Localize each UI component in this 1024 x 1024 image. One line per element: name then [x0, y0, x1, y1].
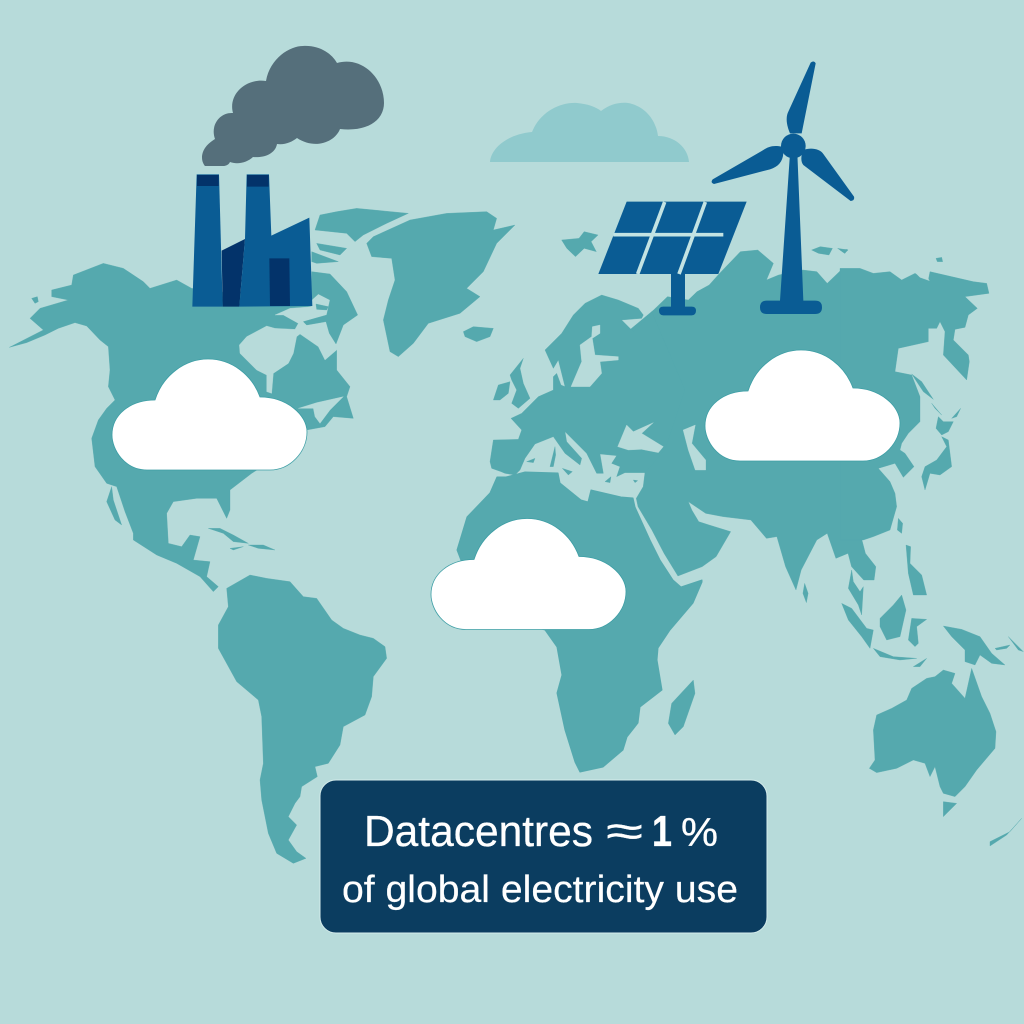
- Baltic Sea: [571, 325, 618, 387]
- turbine hub: [781, 134, 806, 158]
- icon: smoke cloud: [202, 46, 384, 166]
- map: Asia: [562, 232, 876, 603]
- world map: [9, 208, 1023, 863]
- icon: white cloud over Asia: [705, 350, 900, 461]
- Madagascar: [668, 680, 695, 735]
- Africa: [457, 472, 702, 772]
- Hudson Bay and Hudson Strait: [239, 294, 337, 393]
- solar panel post and foot: [659, 273, 696, 315]
- icon: white cloud over North America: [112, 359, 307, 470]
- callout headline: [364, 807, 718, 856]
- Baja California: [107, 487, 122, 525]
- solar panel grid lines: [613, 202, 723, 274]
- icon: factory: [192, 174, 312, 307]
- Hokkaido and Kuril islands: [932, 403, 961, 435]
- Baffin Island: [303, 272, 358, 344]
- callout background: [320, 780, 767, 933]
- Europe landmass: [490, 295, 685, 477]
- icon: solar panel: [598, 202, 747, 315]
- Arctic islands: [32, 208, 408, 303]
- map: East Asia: [840, 249, 989, 540]
- Sri Lanka: [803, 583, 808, 603]
- map: Southeast Asia and Oceania: [842, 545, 1023, 846]
- Greenland: [367, 212, 515, 357]
- Malay Peninsula: [848, 570, 863, 615]
- callout headline: %: [681, 811, 718, 855]
- callout headline: 1: [652, 807, 672, 856]
- Foxe Basin island: [316, 304, 328, 310]
- icon: wind turbine: [712, 61, 854, 314]
- northern islands: [840, 249, 943, 262]
- North America: [9, 263, 353, 592]
- factory dark roof section: [222, 239, 245, 307]
- solar panel surface: [598, 202, 747, 274]
- Mediterranean islands: [527, 447, 638, 483]
- Arctic bay: [915, 272, 929, 281]
- Philippines: [906, 545, 927, 595]
- Caspian Sea: [683, 425, 706, 470]
- chimney caps: [197, 175, 269, 187]
- Taiwan: [897, 518, 903, 533]
- Arctic islands of Eurasia: [562, 232, 848, 257]
- Sulawesi: [908, 618, 927, 647]
- Australia: [869, 668, 996, 797]
- turbine blades: [712, 61, 854, 201]
- Ireland: [493, 382, 510, 400]
- map: South America and Madagascar: [218, 575, 695, 863]
- New Guinea: [943, 626, 1005, 665]
- Caribbean islands: [208, 528, 275, 550]
- callout: datacentres statistic: [320, 780, 767, 933]
- South America: [218, 575, 387, 863]
- East Asia landmass: [840, 268, 989, 540]
- factory main building: [239, 174, 312, 307]
- icon: white cloud over Africa: [431, 518, 626, 630]
- Sakhalin: [912, 374, 933, 399]
- New Zealand: [990, 818, 1022, 846]
- map: Europe: [490, 295, 685, 483]
- factory door: [269, 258, 290, 306]
- Britain: [510, 358, 530, 408]
- callout subline: of global electricity use: [342, 869, 738, 911]
- Sumatra: [842, 603, 873, 648]
- turbine tower: [760, 153, 822, 314]
- Honshu: [922, 437, 952, 490]
- factory left chimney: [192, 174, 223, 307]
- callout headline: Datacentres: [364, 807, 593, 856]
- Tasmania: [943, 802, 957, 817]
- Java and Timor: [873, 648, 927, 667]
- Iceland: [463, 327, 493, 342]
- map: Americas north and Greenland: [9, 208, 515, 592]
- Asia landmass: [584, 250, 876, 590]
- Pacific islands: [995, 637, 1023, 652]
- callout headline: ≈: [606, 807, 643, 856]
- Borneo: [880, 595, 906, 640]
- icon: pale cloud in sky: [490, 103, 689, 162]
- Gulf of St Lawrence: [298, 397, 343, 423]
- Black Sea: [618, 423, 663, 453]
